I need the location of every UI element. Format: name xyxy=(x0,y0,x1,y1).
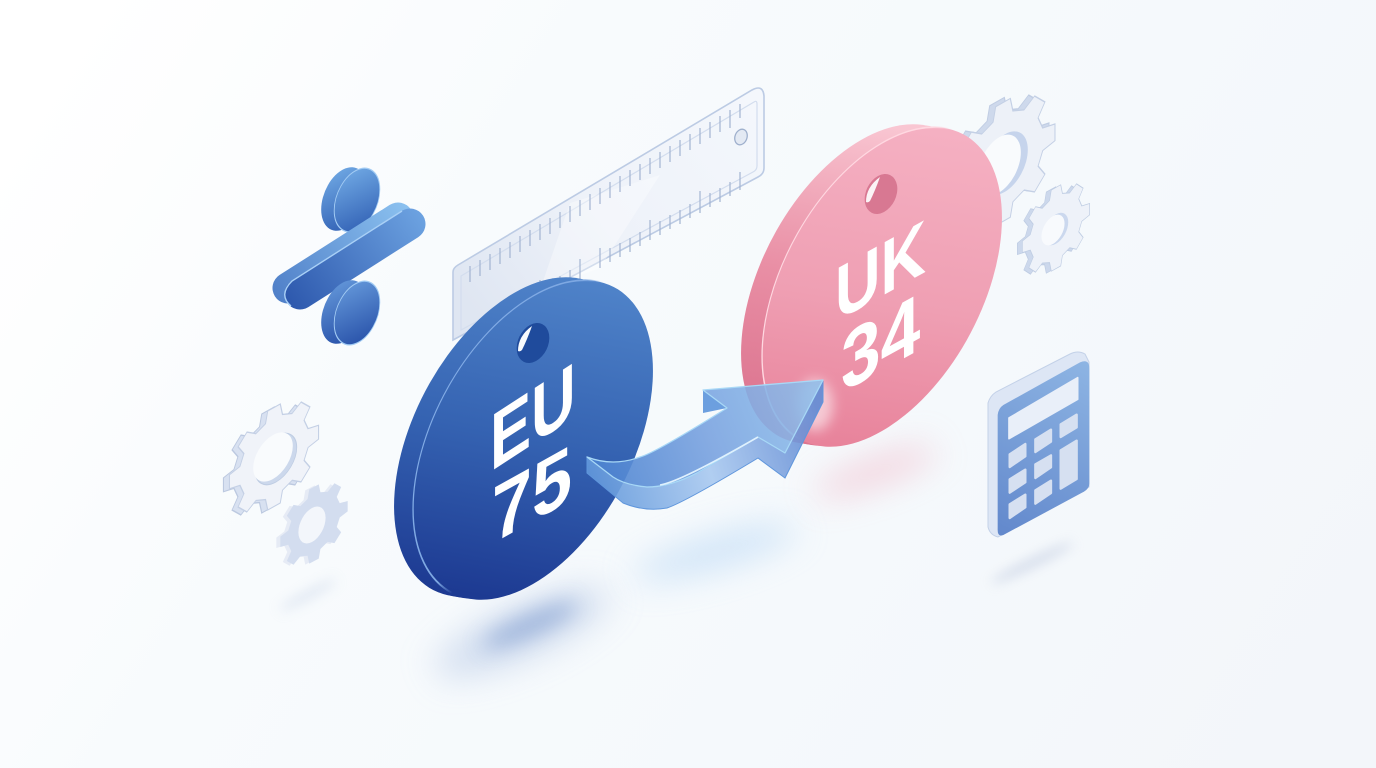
arrow highlight xyxy=(660,437,758,485)
EU hole xyxy=(510,318,556,368)
arrow from EU to UK xyxy=(587,379,833,509)
calculator keys xyxy=(1010,415,1077,518)
UK hole xyxy=(858,169,904,219)
UK disc body xyxy=(741,71,1002,500)
icon: percent sign xyxy=(285,158,410,354)
arrow top face xyxy=(587,380,823,487)
arrow side faces xyxy=(587,380,823,509)
EU label: EU xyxy=(490,345,576,490)
percent top dot xyxy=(321,158,380,240)
EU tag xyxy=(394,224,653,653)
small right gear xyxy=(1017,169,1090,289)
34 label: 34 xyxy=(841,276,921,411)
arrow tip glow xyxy=(797,379,833,431)
icon: gears left xyxy=(223,383,348,580)
icon: ruler xyxy=(453,88,764,340)
icon: gears right xyxy=(945,72,1090,289)
percent bar xyxy=(285,211,410,306)
ruler hole xyxy=(733,127,749,147)
big right gear xyxy=(945,72,1055,251)
75 label: 75 xyxy=(492,429,572,562)
UK tag xyxy=(741,71,1002,500)
floor shadows xyxy=(278,438,1075,694)
calculator screen xyxy=(1009,378,1078,439)
EU disc body xyxy=(394,224,653,653)
big outlined gear xyxy=(223,383,319,534)
ruler ticks xyxy=(470,104,740,300)
percent bottom dot xyxy=(321,272,380,354)
icon: calculator xyxy=(988,352,1089,537)
ruler gloss xyxy=(540,175,660,290)
small filled gear xyxy=(276,469,348,580)
UK label: UK xyxy=(835,203,926,338)
